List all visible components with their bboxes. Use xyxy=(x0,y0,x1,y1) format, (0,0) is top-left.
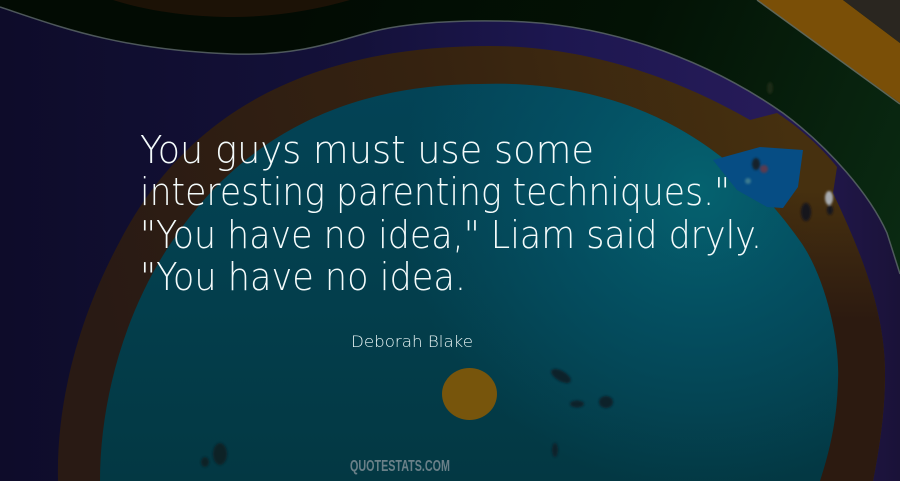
watermark: QUOTESTATS.COM xyxy=(350,458,450,475)
white edge line of purple surface xyxy=(0,7,900,274)
quote text: "You have no idea," Liam said dryly. xyxy=(140,213,762,257)
orange track top right xyxy=(757,0,900,103)
quote text: "You have no idea. xyxy=(140,255,466,299)
quote text xyxy=(140,128,762,299)
brown ring lower right shading xyxy=(780,193,885,481)
people on blue patch xyxy=(745,158,768,184)
teal pool bright area xyxy=(100,84,838,481)
quote text: You guys must use some xyxy=(140,128,594,172)
yellow disc xyxy=(442,368,497,420)
swimmers xyxy=(549,366,613,457)
people lower left xyxy=(201,443,227,467)
author: Deborah Blake xyxy=(351,332,473,351)
grey corner top right xyxy=(843,0,900,43)
quote text: interesting parenting techniques." xyxy=(140,170,730,214)
track edge line top right xyxy=(757,0,900,104)
teal pool xyxy=(100,84,838,481)
blue patch xyxy=(713,147,803,208)
top brown path xyxy=(113,0,350,17)
person on lawn xyxy=(767,82,773,94)
people on the track xyxy=(801,191,833,221)
